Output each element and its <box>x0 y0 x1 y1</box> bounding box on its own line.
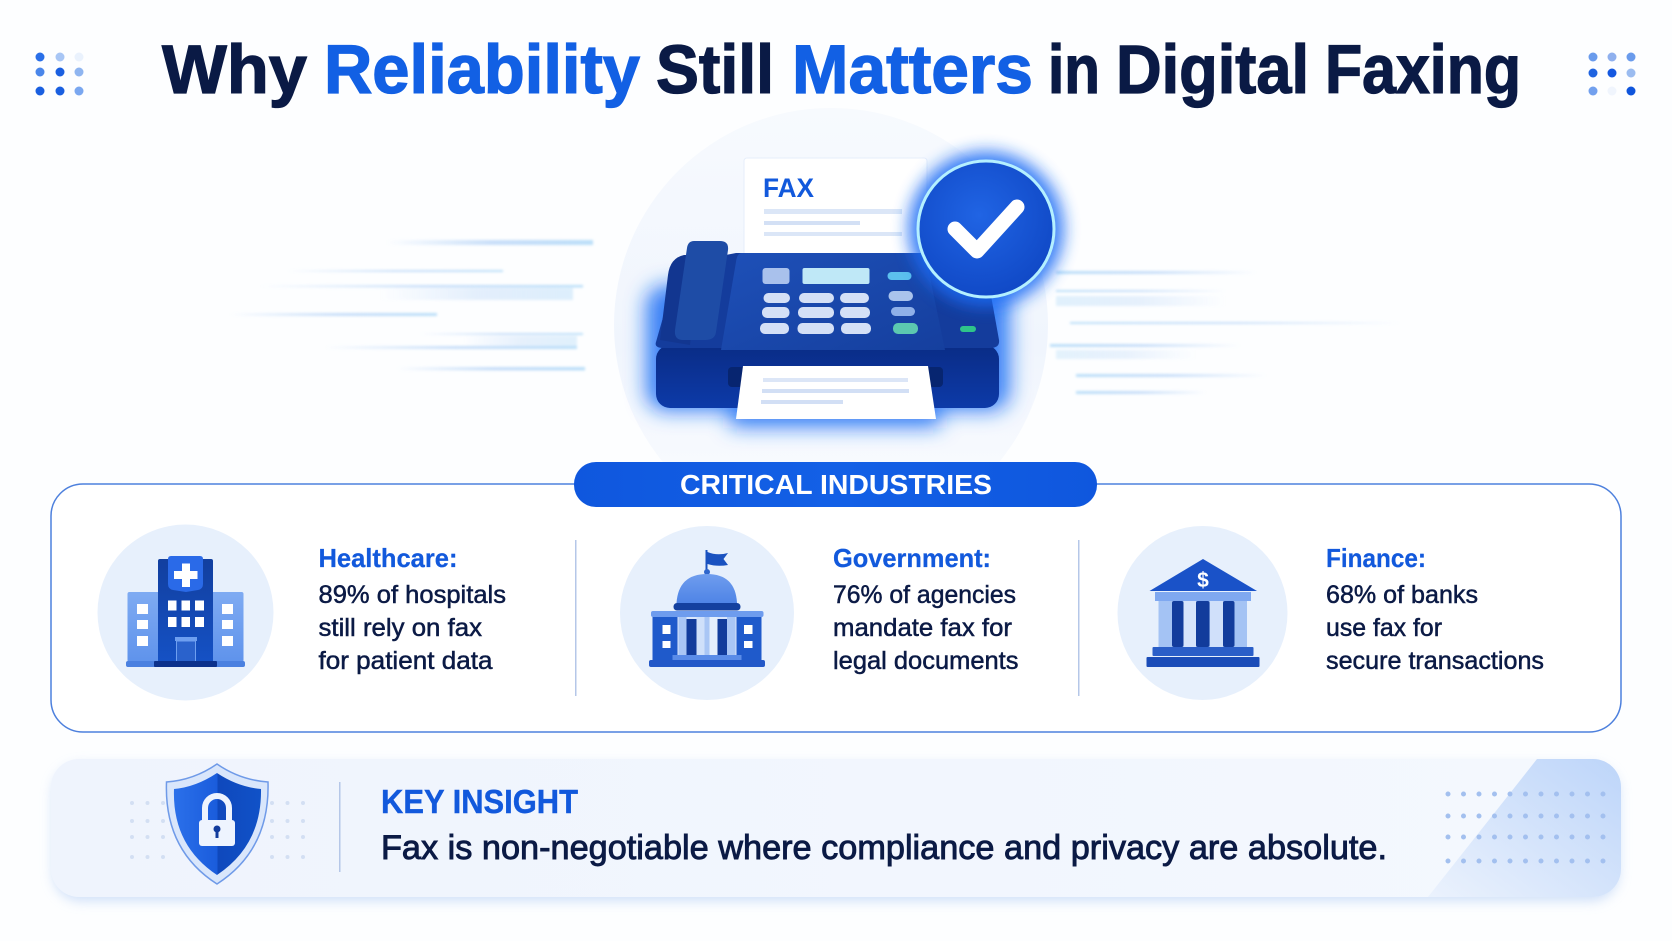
title: Still <box>656 31 774 108</box>
paper going in: FAX <box>763 173 814 203</box>
text: finance: Finance: <box>1326 543 1426 573</box>
text: government: legal documents <box>833 647 1018 675</box>
dot grid: right <box>1448 794 1606 861</box>
text: healthcare <box>318 543 506 675</box>
paper going in <box>744 158 927 268</box>
title: Digital <box>1116 31 1309 108</box>
backdrop circle behind fax <box>614 108 1048 542</box>
panel: key insight <box>51 759 1621 901</box>
fax machine illustration <box>646 151 1064 427</box>
text: finance <box>1326 543 1544 675</box>
fax top panel <box>656 253 999 348</box>
fax glow <box>646 285 1010 427</box>
icon: bank <box>1118 526 1288 700</box>
text: government: mandate fax for <box>833 614 1012 642</box>
pill heading: CRITICAL INDUSTRIES <box>680 469 992 500</box>
paper coming out <box>736 366 936 419</box>
text: government <box>833 543 1018 675</box>
handset <box>660 241 728 345</box>
divider <box>339 782 340 872</box>
panel: critical industries <box>51 462 1621 732</box>
speed streaks: right <box>1050 271 1400 394</box>
text: healthcare: 89% of hospitals <box>318 581 506 609</box>
keypad panel <box>721 253 945 350</box>
text: healthcare: still rely on fax <box>318 614 483 642</box>
decorative dots: top right <box>1588 52 1636 96</box>
title: Why <box>162 31 307 108</box>
icon: bank: $ <box>1197 569 1209 592</box>
fax base <box>656 345 999 408</box>
text: key insight statement: Fax is non-negotiable where compliance and privacy are absolute. <box>381 829 1387 867</box>
title: Reliability <box>324 31 640 108</box>
text: healthcare: for patient data <box>318 647 493 675</box>
title: in <box>1048 31 1100 108</box>
text: government: 76% of agencies <box>833 581 1016 609</box>
dot grid: around shield <box>132 803 306 857</box>
corner accent <box>1428 759 1621 897</box>
check badge <box>908 151 1064 307</box>
text: finance: use fax for <box>1326 614 1442 642</box>
icon: government building <box>620 526 794 700</box>
text: finance: secure transactions <box>1326 647 1544 675</box>
text: government: Government: <box>833 543 991 573</box>
output slot <box>728 367 943 387</box>
text: finance: 68% of banks <box>1326 581 1478 609</box>
title: Faxing <box>1325 31 1521 108</box>
decorative dots: top left <box>36 52 84 96</box>
icon: shield with lock <box>166 764 268 884</box>
dividers <box>575 540 1080 696</box>
icon: hospital <box>98 524 274 700</box>
text: key insight heading: KEY INSIGHT <box>381 783 578 820</box>
title <box>162 31 1521 108</box>
display and buttons <box>760 268 976 334</box>
text: healthcare: Healthcare: <box>318 543 458 573</box>
speed streaks: left <box>230 240 593 370</box>
title: Matters <box>792 31 1033 108</box>
pill heading <box>574 462 1097 507</box>
